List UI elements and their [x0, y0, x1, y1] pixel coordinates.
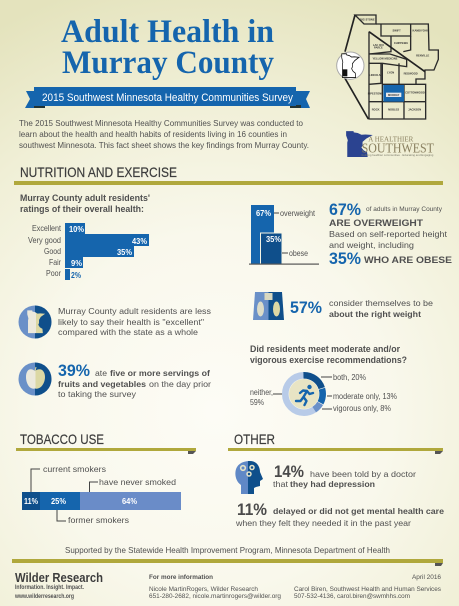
bar chart: overall health ratings: 10%: [69, 225, 84, 234]
donut chart: exercise recommendations: 59%: [250, 398, 264, 407]
map of 16 southwest Minnesota counties: [337, 15, 438, 119]
bar chart: overall health ratings: 2%: [71, 271, 81, 280]
stat: 14% depression: have been told by a doctor: [310, 469, 416, 479]
stacked bar: tobacco use: current smokers: [43, 464, 106, 474]
stat: 39% fruits and vegetables: [58, 361, 211, 399]
map of 16 southwest Minnesota counties: MURRAY: [388, 93, 400, 97]
bar chart: overall health ratings: Fair: [49, 257, 61, 267]
stat: 67% overweight, 35% obese: Based on self-reported height: [329, 229, 448, 239]
footer: contact information: For more information: [149, 574, 213, 581]
footer: Wilder Research brand: Wilder Research: [15, 570, 103, 585]
map of 16 southwest Minnesota counties: PIPESTONE: [368, 92, 383, 96]
stat: 57% right weight: consider themselves to be: [329, 298, 433, 308]
chart: overweight and obese bars: 67%: [256, 209, 271, 218]
chart: overweight and obese bars: obese: [289, 249, 308, 258]
footer: contact information: April 2016: [412, 574, 441, 581]
heading: tobacco use: [16, 431, 196, 454]
stat: 57% right weight: 57%: [290, 298, 322, 317]
footer: contact information: 507-532-4136, carol.biren@swmhhs.com: [294, 593, 410, 600]
chart: overweight and obese bars: [249, 205, 319, 265]
icon: running figure: [296, 385, 313, 405]
stat: 57% right weight: [290, 298, 433, 319]
title: [61, 14, 274, 81]
footer: Wilder Research brand: www.wilderresearch.org: [14, 594, 74, 600]
stacked bar: tobacco use: former smokers: [68, 515, 129, 525]
map of 16 southwest Minnesota counties: YELLOW MEDICINE: [372, 57, 398, 61]
map of 16 southwest Minnesota counties: SWIFT: [393, 28, 401, 32]
bar chart: overall health ratings: [28, 223, 149, 280]
map of 16 southwest Minnesota counties: COTTONWOOD: [405, 90, 425, 94]
stat: 11% delayed mental health care: 11%: [237, 500, 267, 519]
stat: 39% fruits and vegetables: five or more servings of: [110, 368, 210, 378]
stat: 39% fruits and vegetables: 39%: [58, 361, 90, 380]
donut chart: exercise recommendations: moderate only, 13%: [333, 392, 397, 401]
donut chart: exercise recommendations: neither,: [250, 388, 273, 397]
text: less likely to say excellent: Murray County adult residents are less: [58, 306, 211, 316]
logo: A Healthier Southwest: building healthier communities · Educating and Engaging: [362, 154, 434, 157]
stat: 11% delayed mental health care: [235, 500, 444, 528]
heading: other: [228, 431, 443, 454]
footer: Wilder Research brand: Information. Insight. Impact.: [15, 585, 84, 591]
chart: overweight and obese bars: 35%: [266, 235, 281, 244]
icon: bathroom scale with feet: [253, 292, 284, 320]
subheading: exercise recommendations question: Did residents meet moderate and/or: [250, 344, 400, 354]
map of 16 southwest Minnesota counties: NOBLES: [388, 107, 399, 111]
map of 16 southwest Minnesota counties: PARLE: [374, 46, 383, 50]
text: less likely to say excellent: likely to say their health is "excellent": [58, 317, 204, 327]
map of 16 southwest Minnesota counties: REDWOOD: [404, 71, 418, 75]
map of 16 southwest Minnesota counties: CHIPPEWA: [394, 41, 408, 45]
map of 16 southwest Minnesota counties: BIG STONE: [360, 18, 375, 22]
bar chart: overall health ratings: 9%: [71, 259, 82, 268]
bar chart: overall health ratings: Excellent: [32, 223, 62, 233]
donut chart: exercise recommendations: both, 20%: [333, 373, 366, 382]
stat: 57% right weight: about the right weight: [329, 309, 421, 319]
stat: 14% depression: 14%: [274, 462, 304, 481]
survey ribbon banner: [25, 87, 310, 108]
logo: A Healthier Southwest: A HEALTHIER: [368, 136, 414, 144]
heading: nutrition and exercise: NUTRITION AND EXERCISE: [20, 164, 177, 180]
stat: 39% fruits and vegetables: to taking the survey: [58, 389, 137, 399]
heading: nutrition and exercise: [14, 164, 443, 185]
icon: head with gears: [235, 461, 263, 494]
bar chart: overall health ratings: Poor: [46, 268, 61, 278]
stat: 67% overweight, 35% obese: 35%: [329, 249, 361, 268]
stacked bar: tobacco use: 11%: [24, 497, 38, 506]
stat: 67% overweight, 35% obese: ARE OVERWEIGHT: [329, 218, 424, 228]
heading: other: OTHER: [234, 431, 275, 447]
inset locator: Minnesota state in a circle: [337, 52, 364, 79]
logo: A Healthier Southwest: SOUTHWEST: [362, 141, 434, 156]
bar chart: overall health ratings: 35%: [117, 248, 132, 257]
icon: apple in circle: [18, 362, 52, 396]
title: Adult Health in: [61, 14, 274, 50]
chart: overweight and obese bars: overweight: [280, 209, 316, 218]
stat: 11% delayed mental health care: delayed or did not get mental health care: [273, 506, 444, 516]
map of 16 southwest Minnesota counties: RENVILLE: [416, 54, 429, 58]
subheading: ratings of overall health: [20, 193, 150, 214]
stat: 14% depression: that: [273, 479, 289, 489]
stat: 11% delayed mental health care: when they felt they needed it in the past year: [235, 518, 411, 528]
subheading: exercise recommendations question: [250, 344, 407, 365]
stacked bar: tobacco use: have never smoked: [99, 477, 176, 487]
stat: 39% fruits and vegetables: ate: [95, 368, 107, 378]
map of 16 southwest Minnesota counties: KANDIYOHI: [413, 29, 428, 33]
donut chart: exercise recommendations: [250, 373, 397, 413]
map of 16 southwest Minnesota counties: ROCK: [372, 107, 380, 111]
stacked bar: tobacco use: 25%: [51, 497, 66, 506]
bar chart: overall health ratings: 43%: [132, 237, 147, 246]
map of 16 southwest Minnesota counties: JACKSON: [408, 107, 421, 111]
stacked bar: tobacco use: [22, 464, 181, 525]
donut chart: exercise recommendations: vigorous only, 8%: [333, 404, 391, 413]
subheading: exercise recommendations question: vigorous exercise recommendations?: [250, 355, 407, 365]
funding statement: Supported by the Statewide Health Improvement Program, Minnesota Department of Health: [65, 545, 390, 555]
text: less likely to say excellent: compared with the state as a whole: [58, 327, 198, 337]
intro paragraph: learn about the health and health habits of residents living in 16 counties in: [19, 129, 287, 139]
text: less likely to say excellent: [58, 306, 211, 337]
bar chart: overall health ratings: Good: [44, 246, 61, 256]
footer rule: [12, 559, 443, 566]
stat: 67% overweight, 35% obese: 67%: [329, 200, 361, 219]
stat: 14% depression: they had depression: [290, 479, 375, 489]
stat: 39% fruits and vegetables: on the day prior: [149, 379, 211, 389]
footer: Wilder Research brand: [14, 570, 103, 600]
bar chart: overall health ratings: Very good: [28, 235, 61, 245]
logo: A Healthier Southwest: [346, 131, 434, 157]
map of 16 southwest Minnesota counties: LINCOLN: [369, 73, 381, 77]
stacked bar: tobacco use: 64%: [122, 497, 137, 506]
stat: 67% overweight, 35% obese: of adults in Murray County: [366, 206, 443, 213]
stat: 39% fruits and vegetables: fruits and vegetables: [58, 379, 146, 389]
footer: contact information: Nicole MartinRogers, Wilder Research: [149, 586, 258, 593]
intro paragraph: [19, 118, 309, 150]
map of 16 southwest Minnesota counties: LYON: [387, 70, 394, 74]
subheading: ratings of overall health: Murray County adult residents': [20, 193, 150, 203]
intro paragraph: southwest Minnesota. This fact sheet shows the key findings from Murray County.: [19, 140, 309, 150]
stat: 67% overweight, 35% obese: [329, 200, 452, 268]
stat: 67% overweight, 35% obese: and weight, including: [329, 240, 414, 250]
heading: tobacco use: TOBACCO USE: [20, 431, 104, 447]
survey ribbon banner: 2015 Southwest Minnesota Healthy Communities Survey: [42, 92, 293, 104]
subheading: ratings of overall health: ratings of their overall health:: [20, 204, 144, 214]
intro paragraph: The 2015 Southwest Minnesota Healthy Communities Survey was conducted to: [19, 118, 303, 128]
footer: contact information: Carol Biren, Southwest Health and Human Services: [294, 586, 441, 593]
map of 16 southwest Minnesota counties: LAC QUI: [373, 43, 384, 47]
stat: 14% depression: [273, 462, 416, 489]
footer: contact information: 651-280-2682, nicole.martinrogers@wilder.org: [149, 593, 281, 600]
title: Murray County: [62, 45, 274, 81]
icon: Minnesota state in circle: [18, 306, 52, 338]
stat: 67% overweight, 35% obese: WHO ARE OBESE: [364, 255, 452, 265]
footer: contact information: [149, 574, 441, 600]
